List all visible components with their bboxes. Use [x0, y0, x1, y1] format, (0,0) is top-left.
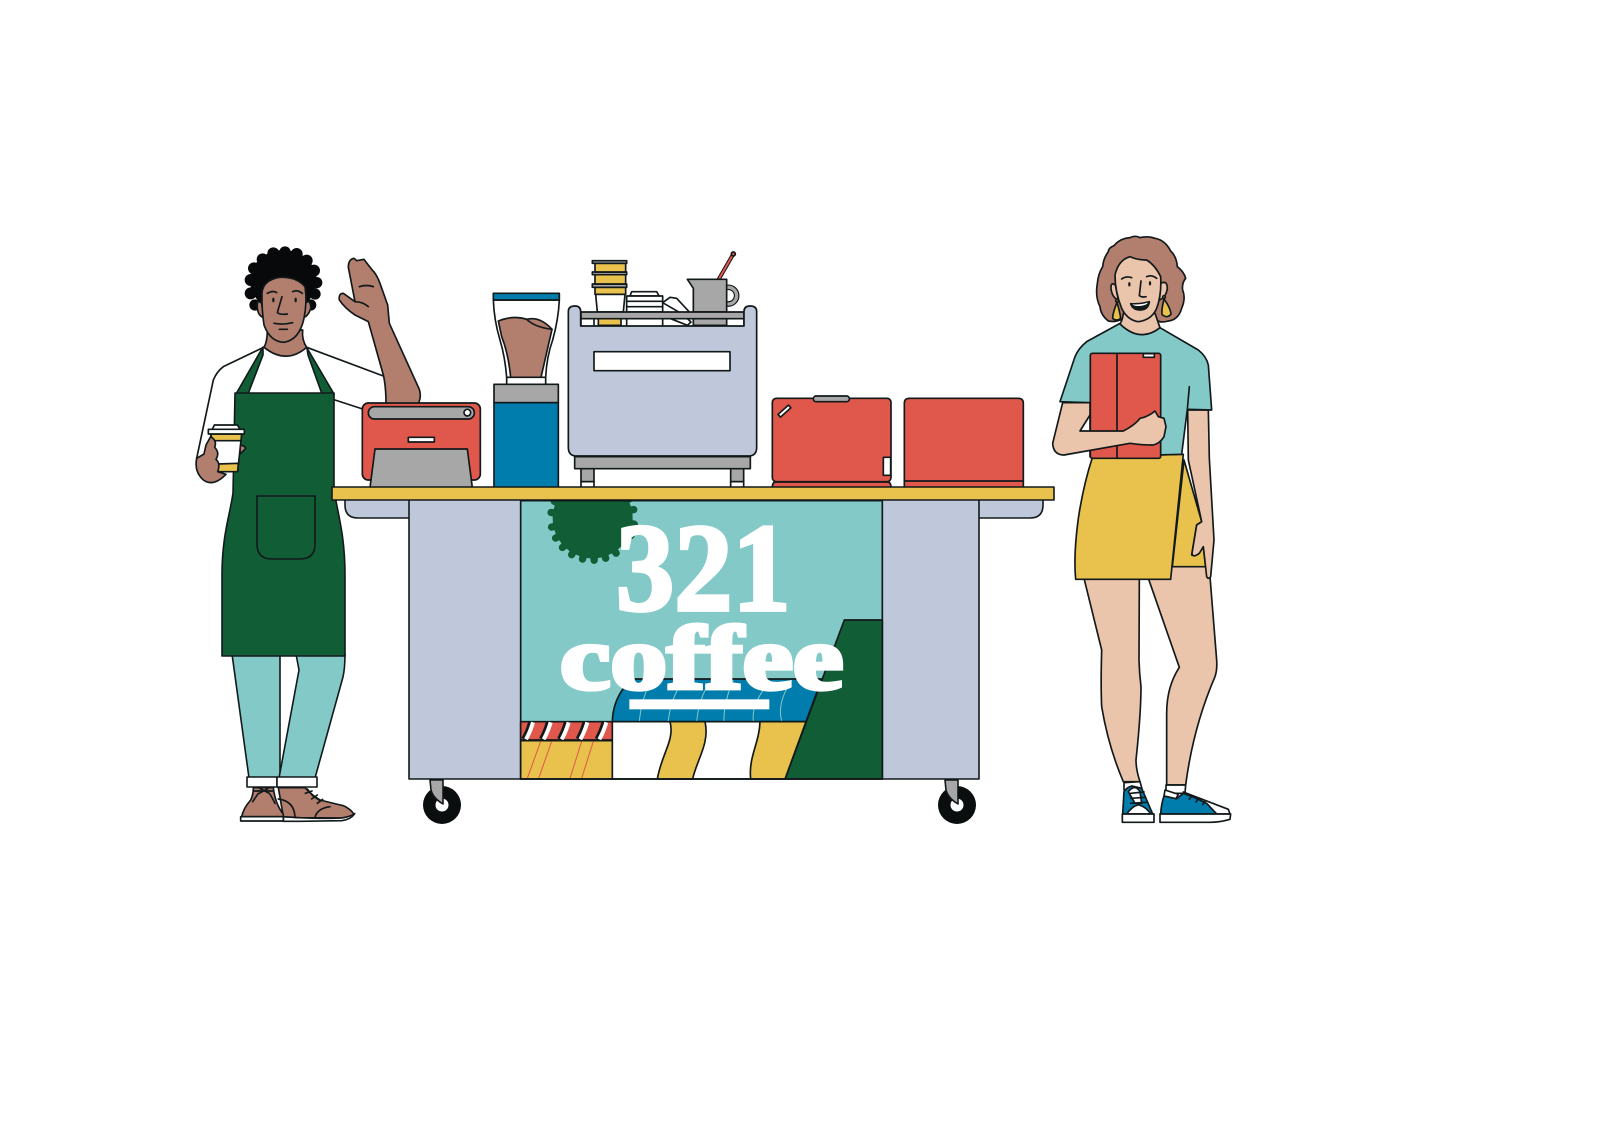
barista trousers — [232, 654, 345, 787]
barista shirt — [197, 347, 383, 458]
machine legs — [581, 468, 744, 488]
machine base — [575, 457, 750, 469]
machine body — [568, 306, 757, 456]
customer left arm and hand — [1053, 403, 1166, 455]
customer head and neck — [1111, 257, 1171, 335]
coffee grinder — [493, 293, 559, 488]
mural: yellow block with red lines — [521, 741, 612, 779]
milk jug with spoon — [687, 252, 737, 312]
customer skirt back — [1172, 460, 1206, 567]
cart right panel — [882, 498, 979, 779]
barista raised arm — [339, 258, 420, 403]
cart wheels — [423, 780, 976, 824]
customer legs and sneakers — [1084, 562, 1231, 822]
logo word coffee: coffee — [560, 609, 843, 708]
customer right arm — [1188, 410, 1214, 578]
illustration: coffee cart scene with barista and customer — [195, 236, 1232, 824]
barista afro hair — [245, 246, 322, 311]
barista apron — [222, 347, 345, 656]
cart counter top — [332, 487, 1054, 500]
coffee cart — [332, 252, 1054, 824]
saucer stack — [627, 292, 663, 312]
mural: green sunburst — [547, 502, 638, 564]
mural: red and white striped block — [521, 722, 612, 740]
mural: water lines — [639, 680, 792, 721]
customer tablet — [1090, 353, 1161, 458]
customer t-shirt — [1060, 323, 1212, 457]
customer skirt front — [1075, 454, 1183, 579]
barista head — [245, 246, 322, 356]
red equipment case with handle — [772, 396, 891, 487]
mural: blue awning — [612, 679, 822, 722]
earrings — [1113, 296, 1171, 320]
logo number 321: 321 — [616, 500, 791, 638]
person: barista — [196, 246, 420, 821]
cart left panel — [409, 498, 521, 779]
mural: green hill — [785, 620, 882, 779]
red equipment case plain — [904, 398, 1023, 487]
mural: white and yellow wave block — [612, 722, 806, 779]
mural frame — [521, 501, 882, 779]
barista hand holding takeaway cup — [196, 425, 246, 483]
apron pocket — [257, 496, 315, 559]
logo underline — [629, 699, 769, 709]
person: customer — [1053, 236, 1231, 822]
takeaway cup stack — [592, 261, 627, 312]
customer hair — [1097, 236, 1186, 322]
stacked cups on side — [663, 297, 690, 313]
cart front mural with logo — [521, 476, 882, 779]
POS terminal — [362, 403, 480, 488]
cart side shelves — [345, 498, 1043, 518]
barista boots — [241, 788, 355, 821]
espresso machine — [568, 252, 757, 488]
